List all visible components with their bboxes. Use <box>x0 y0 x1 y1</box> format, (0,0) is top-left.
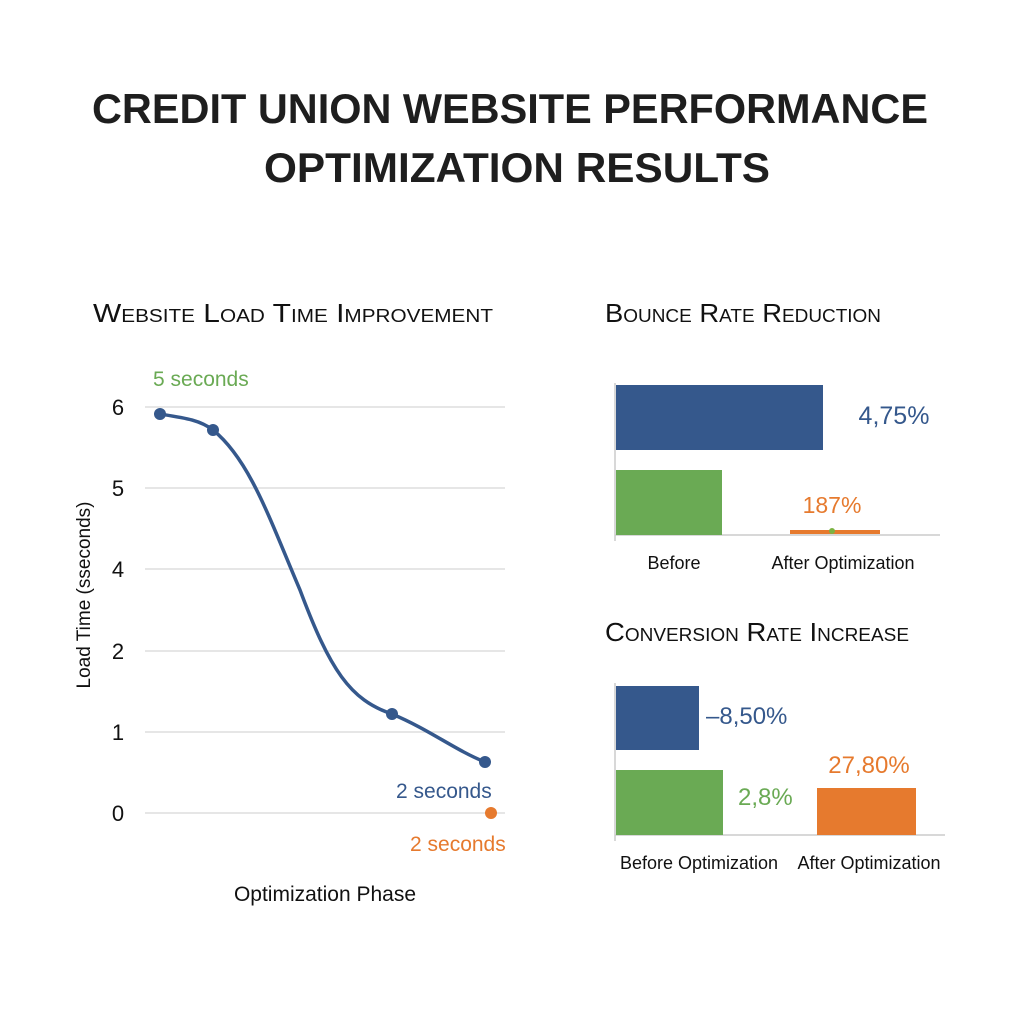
y axis ticks: 6 <box>112 395 124 420</box>
y axis ticks: 5 <box>112 476 124 501</box>
panel: conversion rate: Before Optimization <box>620 853 778 873</box>
panel: load time line chart <box>74 298 506 906</box>
x axis label: Optimization Phase <box>234 883 416 906</box>
panel: conversion rate: –8,50% <box>706 703 787 730</box>
heading: conversion: Conversion Rate Increase <box>605 617 909 647</box>
y axis ticks: 0 <box>112 801 124 826</box>
panel: load time line chart: 2 seconds <box>396 780 492 803</box>
line series <box>154 408 497 819</box>
title: OPTIMIZATION RESULTS <box>264 144 770 191</box>
y axis ticks: 2 <box>112 639 124 664</box>
panel: load time line chart: 2 seconds <box>410 833 506 856</box>
y axis label: Load Time (sseconds) <box>74 502 95 688</box>
panel: conversion rate: After Optimization <box>797 853 941 873</box>
title <box>92 85 928 191</box>
heading: bounce: Bounce Rate Reduction <box>605 298 881 328</box>
panel: conversion rate: 2,8% <box>738 784 793 811</box>
panel: bounce rate: 4,75% <box>859 402 929 430</box>
title: CREDIT UNION WEBSITE PERFORMANCE <box>92 85 928 132</box>
y axis ticks: 4 <box>112 557 124 582</box>
panel: bounce rate: Before <box>647 553 701 573</box>
panel: bounce rate: After Optimization <box>771 553 915 573</box>
y axis ticks <box>112 395 124 826</box>
panel: conversion rate: 27,80% <box>828 752 910 779</box>
data labels: 5 seconds <box>153 368 249 391</box>
panel: bounce rate <box>605 298 940 573</box>
panel: bounce rate: 187% <box>803 492 861 518</box>
heading: load time: Website Load Time Improvement <box>93 298 493 328</box>
y axis ticks: 1 <box>112 720 124 745</box>
panel: conversion rate <box>605 617 945 873</box>
